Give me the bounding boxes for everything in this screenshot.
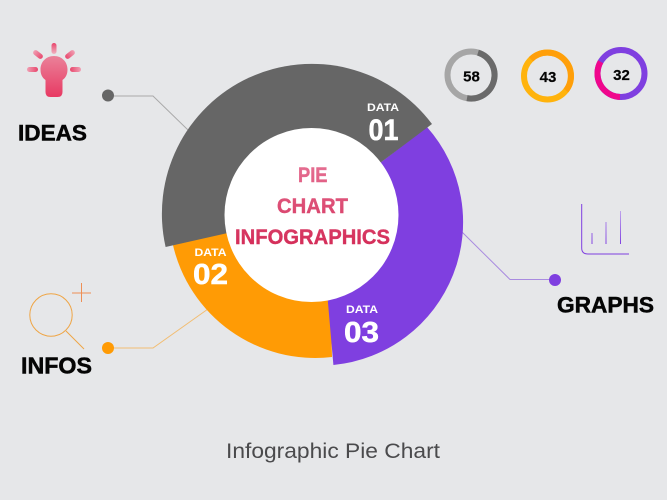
ring: 58 — [448, 52, 495, 99]
donut pie chart — [162, 64, 463, 365]
center title: INFOGRAPHICS — [235, 226, 390, 249]
connector: graphs — [462, 232, 561, 286]
label: data 03: DATA — [346, 304, 378, 316]
heading: ideas: IDEAS — [18, 120, 87, 146]
icon: magnifier with plus — [30, 283, 91, 349]
center title: PIE — [298, 164, 328, 187]
connector: ideas — [102, 90, 188, 130]
icon: bar graph — [582, 204, 629, 254]
center title: CHART — [277, 195, 348, 218]
label: data 03 — [344, 304, 379, 349]
label: data 02 — [193, 247, 228, 291]
ring: 32: 32 — [613, 67, 630, 84]
center circle — [224, 128, 398, 302]
label: data 03: 03 — [344, 317, 379, 349]
label: data 02: DATA — [194, 247, 227, 259]
ring: 43: 43 — [540, 69, 556, 86]
ring: 32 — [597, 50, 644, 97]
heading: graphs: GRAPHS — [557, 292, 654, 318]
heading: infos: INFOS — [21, 352, 92, 378]
ring: 58: 58 — [463, 68, 480, 86]
slice: data 01 gray — [162, 64, 432, 247]
icon: light bulb — [27, 43, 81, 97]
connector: infos — [102, 309, 208, 354]
caption: Infographic Pie Chart — [226, 440, 440, 463]
label: data 01: DATA — [367, 102, 399, 114]
label: data 01 — [367, 102, 399, 147]
slice: data 03 purple — [326, 127, 463, 365]
slice: data 02 orange — [172, 214, 332, 358]
center title — [235, 164, 390, 249]
label: data 02: 02 — [193, 259, 228, 291]
ring: 43 — [524, 52, 571, 100]
label: data 01: 01 — [368, 114, 398, 147]
